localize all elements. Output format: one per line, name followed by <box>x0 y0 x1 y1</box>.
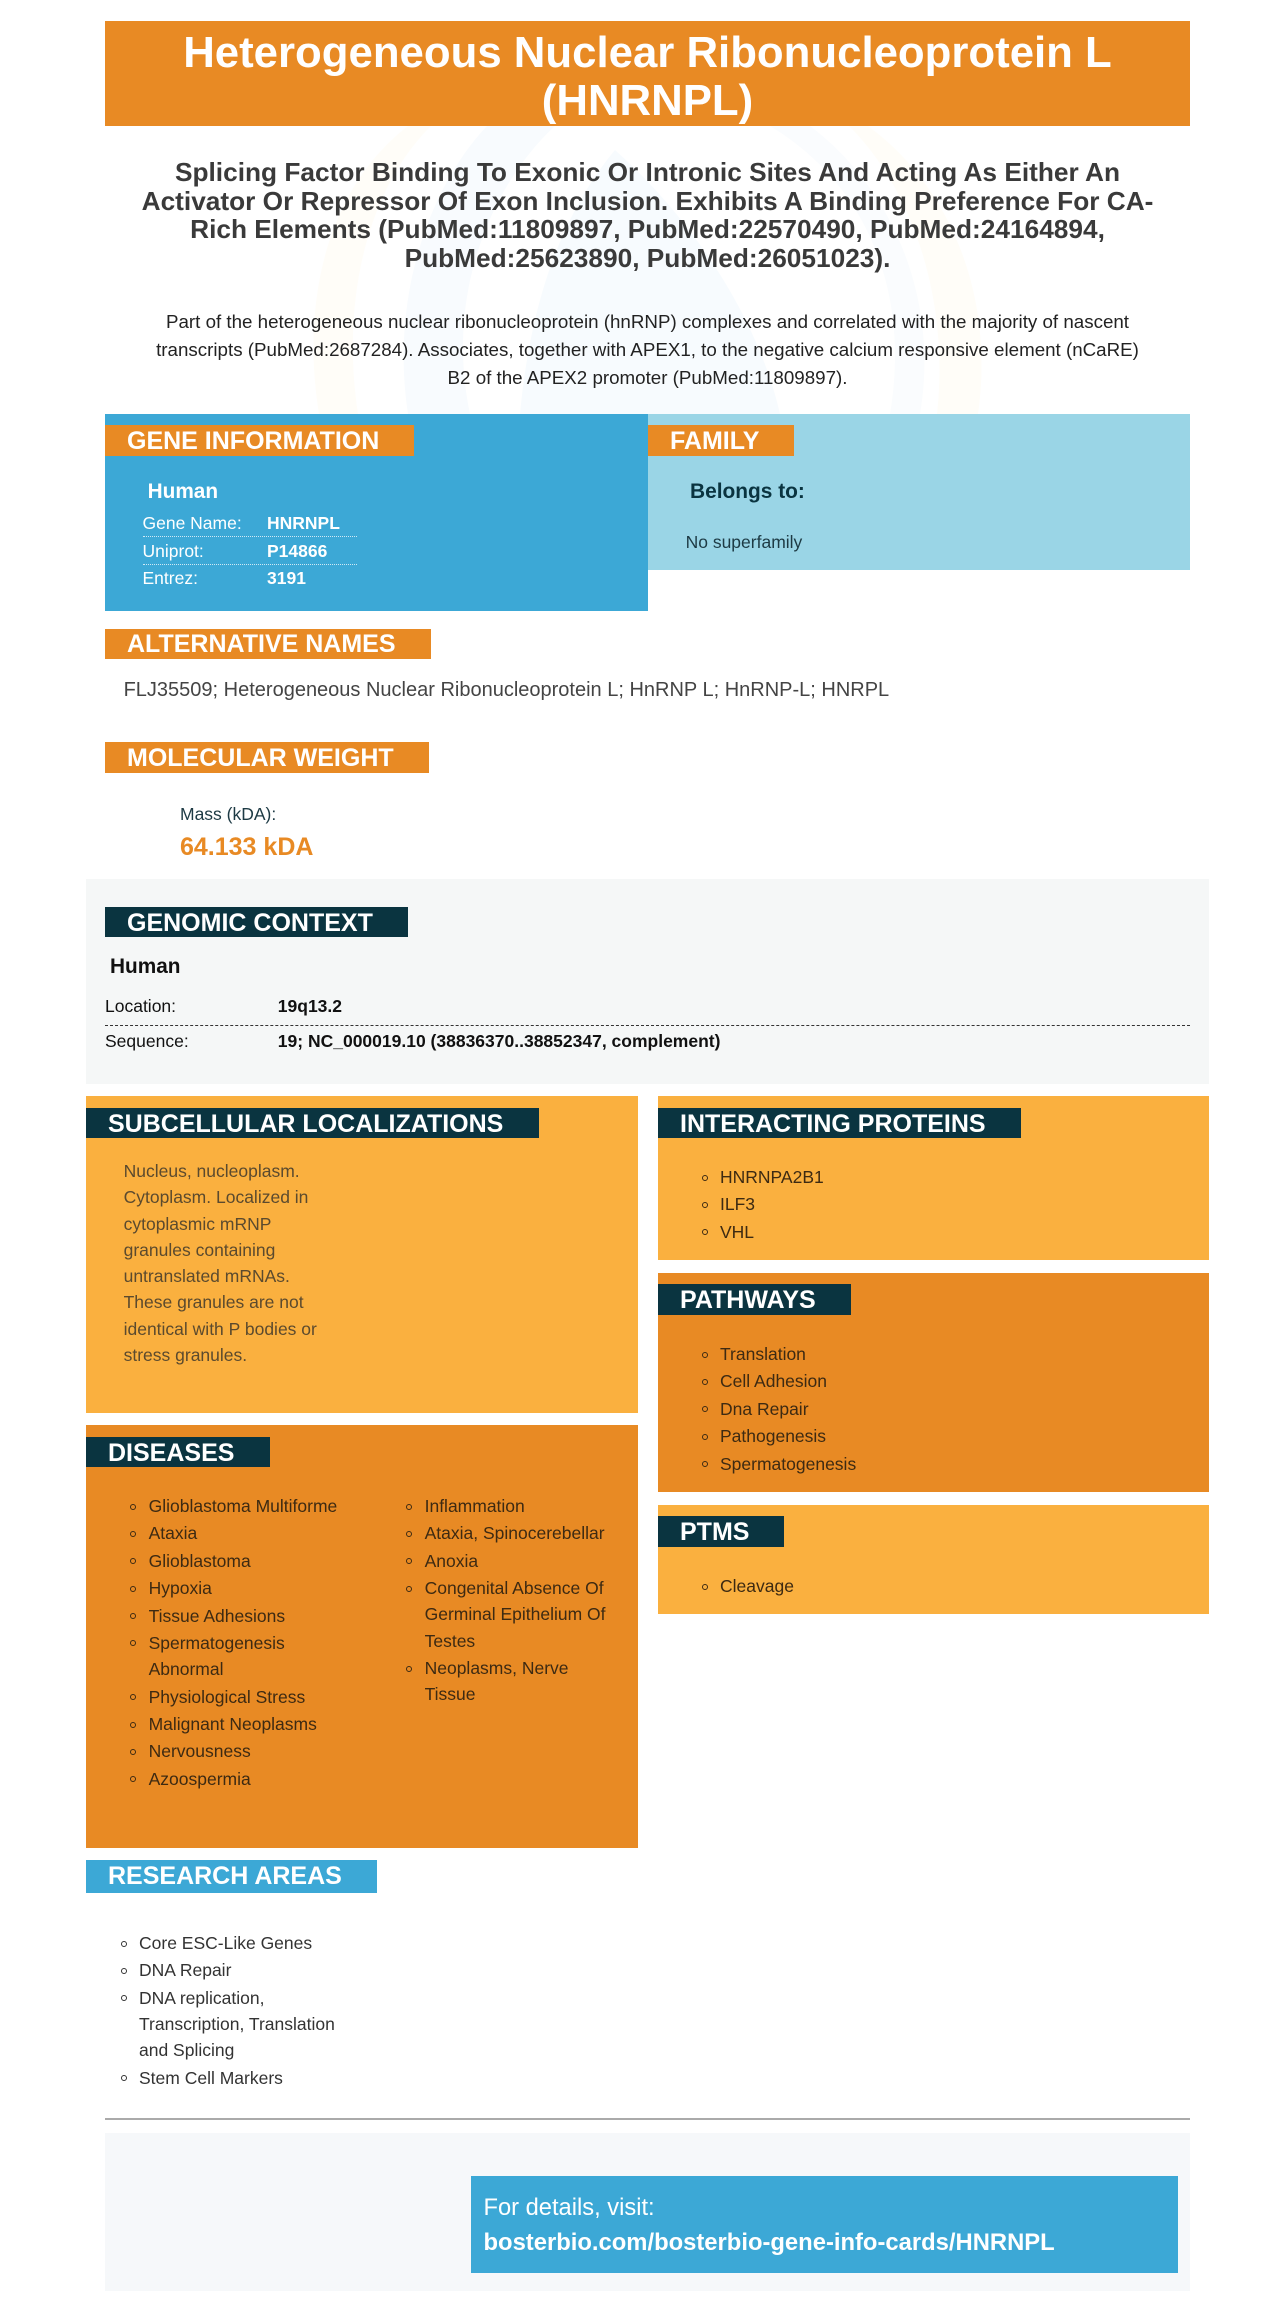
alternative names text: FLJ35509; Heterogeneous Nuclear Ribonucleoprotein L; HnRNP L; HnRNP-L; HNRPL <box>124 679 889 701</box>
mass value: 64.133 kDA <box>180 833 313 861</box>
panel: ptms <box>658 1505 1209 1614</box>
panel: interacting proteins <box>658 1096 1209 1260</box>
panel: footer <box>105 2133 1190 2291</box>
diseases list column 1 <box>130 1496 337 1789</box>
callout: details link <box>471 2176 1178 2273</box>
sequence row: 19; NC_000019.10 (38836370..38852347, complement) <box>278 1031 720 1051</box>
diseases list column 1: Glioblastoma <box>149 1551 251 1571</box>
heading: research areas: RESEARCH AREAS <box>108 1862 342 1890</box>
interacting proteins list: ILF3 <box>720 1194 755 1214</box>
diseases list column 2: Neoplasms, Nerve Tissue <box>425 1658 569 1704</box>
interacting proteins list <box>702 1167 824 1242</box>
heading: research areas <box>86 1860 377 1893</box>
diseases list column 1: Physiological Stress <box>149 1687 305 1707</box>
localization text: cytoplasmic mRNP <box>124 1214 271 1234</box>
pathways list: Pathogenesis <box>720 1426 826 1446</box>
title banner <box>105 21 1190 126</box>
pathways list: Dna Repair <box>720 1399 809 1419</box>
gene name row <box>142 508 357 537</box>
location row: Location: <box>105 996 176 1016</box>
uniprot row <box>142 536 357 565</box>
subtitle: Splicing Factor Binding To Exonic Or Intronic Sites And Acting As Either An <box>175 157 1120 187</box>
subtitle <box>142 157 1153 273</box>
title banner: Heterogeneous Nuclear Ribonucleoprotein L <box>183 28 1112 77</box>
heading: alternative names: ALTERNATIVE NAMES <box>127 630 396 658</box>
pathways list: Cell Adhesion <box>720 1371 827 1391</box>
gene name row: HNRNPL <box>267 513 340 533</box>
gene name row: Gene Name: <box>142 513 242 533</box>
localization text: Cytoplasm. Localized in <box>124 1187 308 1207</box>
heading: ptms <box>658 1516 784 1547</box>
belongs to label: Belongs to: <box>690 480 805 503</box>
heading: diseases: DISEASES <box>108 1439 234 1467</box>
diseases list column 1: Hypoxia <box>149 1578 212 1598</box>
pathways list <box>702 1344 856 1474</box>
ptms list: Cleavage <box>720 1576 794 1596</box>
panel: diseases <box>86 1425 638 1848</box>
mass label: Mass (kDA): <box>180 804 276 824</box>
diseases list column 1: Tissue Adhesions <box>149 1606 285 1626</box>
uniprot row: Uniprot: <box>142 541 204 561</box>
details label: For details, visit: <box>484 2195 655 2221</box>
panel: gene information <box>105 414 648 611</box>
localization text: identical with P bodies or <box>124 1319 317 1339</box>
sequence row: Sequence: <box>105 1031 189 1051</box>
interacting proteins list: HNRNPA2B1 <box>720 1167 824 1187</box>
interacting proteins list: VHL <box>720 1222 754 1242</box>
diseases list column 1: Nervousness <box>149 1741 251 1761</box>
localization text <box>124 1161 317 1365</box>
description paragraph: Part of the heterogeneous nuclear ribonucleoprotein (hnRNP) complexes and correlated with the majority of nascent <box>166 311 1129 332</box>
localization text: Nucleus, nucleoplasm. <box>124 1161 300 1181</box>
heading: diseases <box>86 1437 270 1467</box>
location row <box>105 991 1190 1026</box>
research areas list: Core ESC-Like Genes <box>139 1933 312 1953</box>
background watermark logo <box>280 126 1020 414</box>
entrez row: Entrez: <box>142 568 198 588</box>
uniprot row: P14866 <box>267 541 327 561</box>
diseases list column 2: Inflammation <box>425 1496 525 1516</box>
panel: subcellular localizations <box>86 1096 638 1413</box>
species label: Human <box>148 480 218 503</box>
panel: genomic context <box>86 879 1209 1084</box>
heading: genomic context: GENOMIC CONTEXT <box>127 909 373 937</box>
diseases list column 2: Ataxia, Spinocerebellar <box>425 1523 605 1543</box>
diseases list column 2 <box>406 1496 606 1704</box>
research areas list <box>121 1933 335 2088</box>
title banner: (HNRNPL) <box>542 76 753 125</box>
diseases list column 2: Congenital Absence Of Germinal Epithelium Of Testes <box>425 1578 606 1651</box>
entrez row: 3191 <box>267 568 306 588</box>
research areas list: DNA replication, Transcription, Translation and Splicing <box>139 1988 335 2060</box>
heading: interacting proteins: INTERACTING PROTEINS <box>680 1110 986 1138</box>
heading: ptms: PTMS <box>680 1518 749 1546</box>
description paragraph: B2 of the APEX2 promoter (PubMed:11809897). <box>448 367 847 388</box>
heading: pathways <box>658 1284 851 1315</box>
location row: 19q13.2 <box>278 996 342 1016</box>
subtitle: Activator Or Repressor Of Exon Inclusion. Exhibits A Binding Preference For CA- <box>142 186 1153 216</box>
species label: Human <box>110 955 180 978</box>
subtitle: Rich Elements (PubMed:11809897, PubMed:22570490, PubMed:24164894, <box>190 214 1105 244</box>
research areas list: DNA Repair <box>139 1960 231 1980</box>
diseases list column 1: Spermatogenesis Abnormal <box>149 1633 285 1679</box>
description paragraph <box>156 311 1139 388</box>
subtitle: PubMed:25623890, PubMed:26051023). <box>405 243 890 273</box>
localization text: stress granules. <box>124 1345 247 1365</box>
diseases list column 1: Malignant Neoplasms <box>149 1714 317 1734</box>
heading: family: FAMILY <box>670 427 759 455</box>
entrez row <box>142 568 306 588</box>
family value: No superfamily <box>686 532 802 552</box>
pathways list: Spermatogenesis <box>720 1454 856 1474</box>
description paragraph: transcripts (PubMed:2687284). Associates, together with APEX1, to the negative calcium responsive element (nCaRE) <box>156 339 1139 360</box>
heading: family <box>648 425 794 456</box>
heading: gene information: GENE INFORMATION <box>127 427 379 455</box>
diseases list column 2: Anoxia <box>425 1551 478 1571</box>
panel: pathways <box>658 1273 1209 1492</box>
diseases list column 1: Glioblastoma Multiforme <box>149 1496 337 1516</box>
heading: molecular weight: MOLECULAR WEIGHT <box>127 744 394 772</box>
localization text: granules containing <box>124 1240 275 1260</box>
localization text: untranslated mRNAs. <box>124 1266 290 1286</box>
localization text: These granules are not <box>124 1292 304 1312</box>
diseases list column 1: Ataxia <box>149 1523 197 1543</box>
research areas list: Stem Cell Markers <box>139 2068 283 2088</box>
diseases list column 1: Azoospermia <box>149 1769 251 1789</box>
details url: bosterbio.com/bosterbio-gene-info-cards/HNRNPL <box>484 2229 1055 2256</box>
heading: subcellular localizations: SUBCELLULAR LOCALIZATIONS <box>108 1110 503 1138</box>
heading: pathways: PATHWAYS <box>680 1286 816 1314</box>
pathways list: Translation <box>720 1344 806 1364</box>
panel: family <box>648 414 1190 570</box>
